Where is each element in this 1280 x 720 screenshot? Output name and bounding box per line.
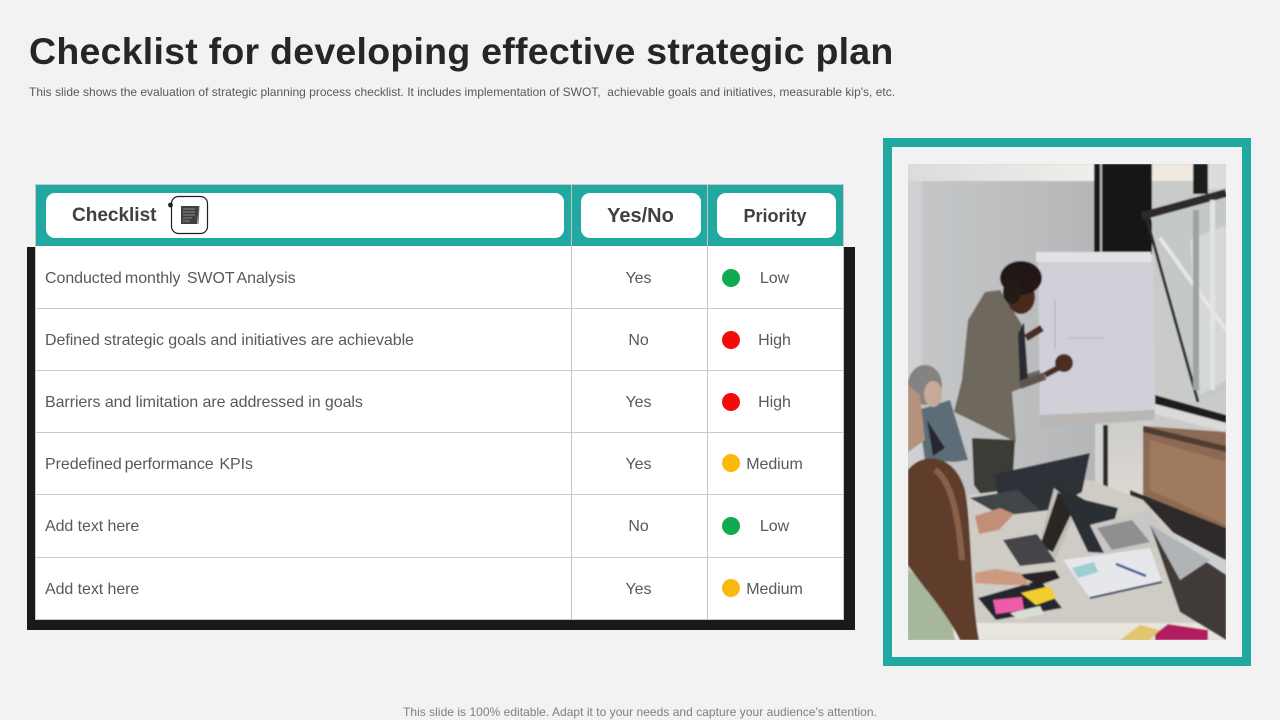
row 1: Low [760,270,789,287]
flipchart [1036,252,1155,490]
header label: Checklist: Checklist [72,205,156,226]
seated colleague [908,365,968,462]
subtitle: This slide shows the evaluation of strategic planning process checklist. It includes implementation of SWOT, achievable goals and initiatives, measurable kip's, etc. [29,85,895,99]
table header band [36,185,843,246]
row 1 [45,269,790,287]
photo: team meeting at flipchart [908,164,1226,640]
row 5 [45,517,790,535]
row 2: No [628,332,649,349]
row 5: No [628,518,649,535]
row 3: Yes [626,394,651,411]
row 3 [45,393,791,411]
black backing panel [27,247,855,630]
row 2: Defined strategic goals and initiatives are achievable [45,332,414,349]
photo frame [883,138,1251,666]
row 1: Conducted monthly SWOT Analysis [45,270,296,287]
header cell: Yes/No [581,193,701,238]
row 6: Medium [746,581,803,598]
footer note: This slide is 100% editable. Adapt it to your needs and capture your audience's attention. [403,705,877,719]
row 4 [45,454,803,473]
row 6 [45,579,803,598]
checklist table [36,185,843,619]
header cell: Priority [717,193,836,238]
title: Checklist for developing effective strategic plan [29,30,894,72]
row 5: Add text here [45,518,139,535]
row 4: Yes [626,456,651,473]
header label: Priority: Priority [743,206,807,226]
row 4: Medium [746,456,803,473]
sticky notes [978,570,1208,640]
right side screen [1150,525,1226,640]
row 6: Add text here [45,581,139,598]
table [968,480,1226,640]
header cell: Checklist [46,193,564,238]
header label: Yes/No: Yes/No [607,205,674,227]
row 2 [45,331,791,349]
window and curtain [1094,164,1226,434]
icon: checklist document [168,196,208,234]
row 4: Predefined performance KPIs [45,456,253,473]
laptops [970,453,1170,598]
row 3: High [758,394,791,411]
row 3: Barriers and limitation are addressed in goals [45,394,363,411]
woman in foreground [908,458,1030,640]
brick wall [1143,426,1226,530]
row 6: Yes [626,581,651,598]
presenter [954,261,1073,500]
row 2: High [758,332,791,349]
row 5: Low [760,518,789,535]
row 1: Yes [626,270,651,287]
